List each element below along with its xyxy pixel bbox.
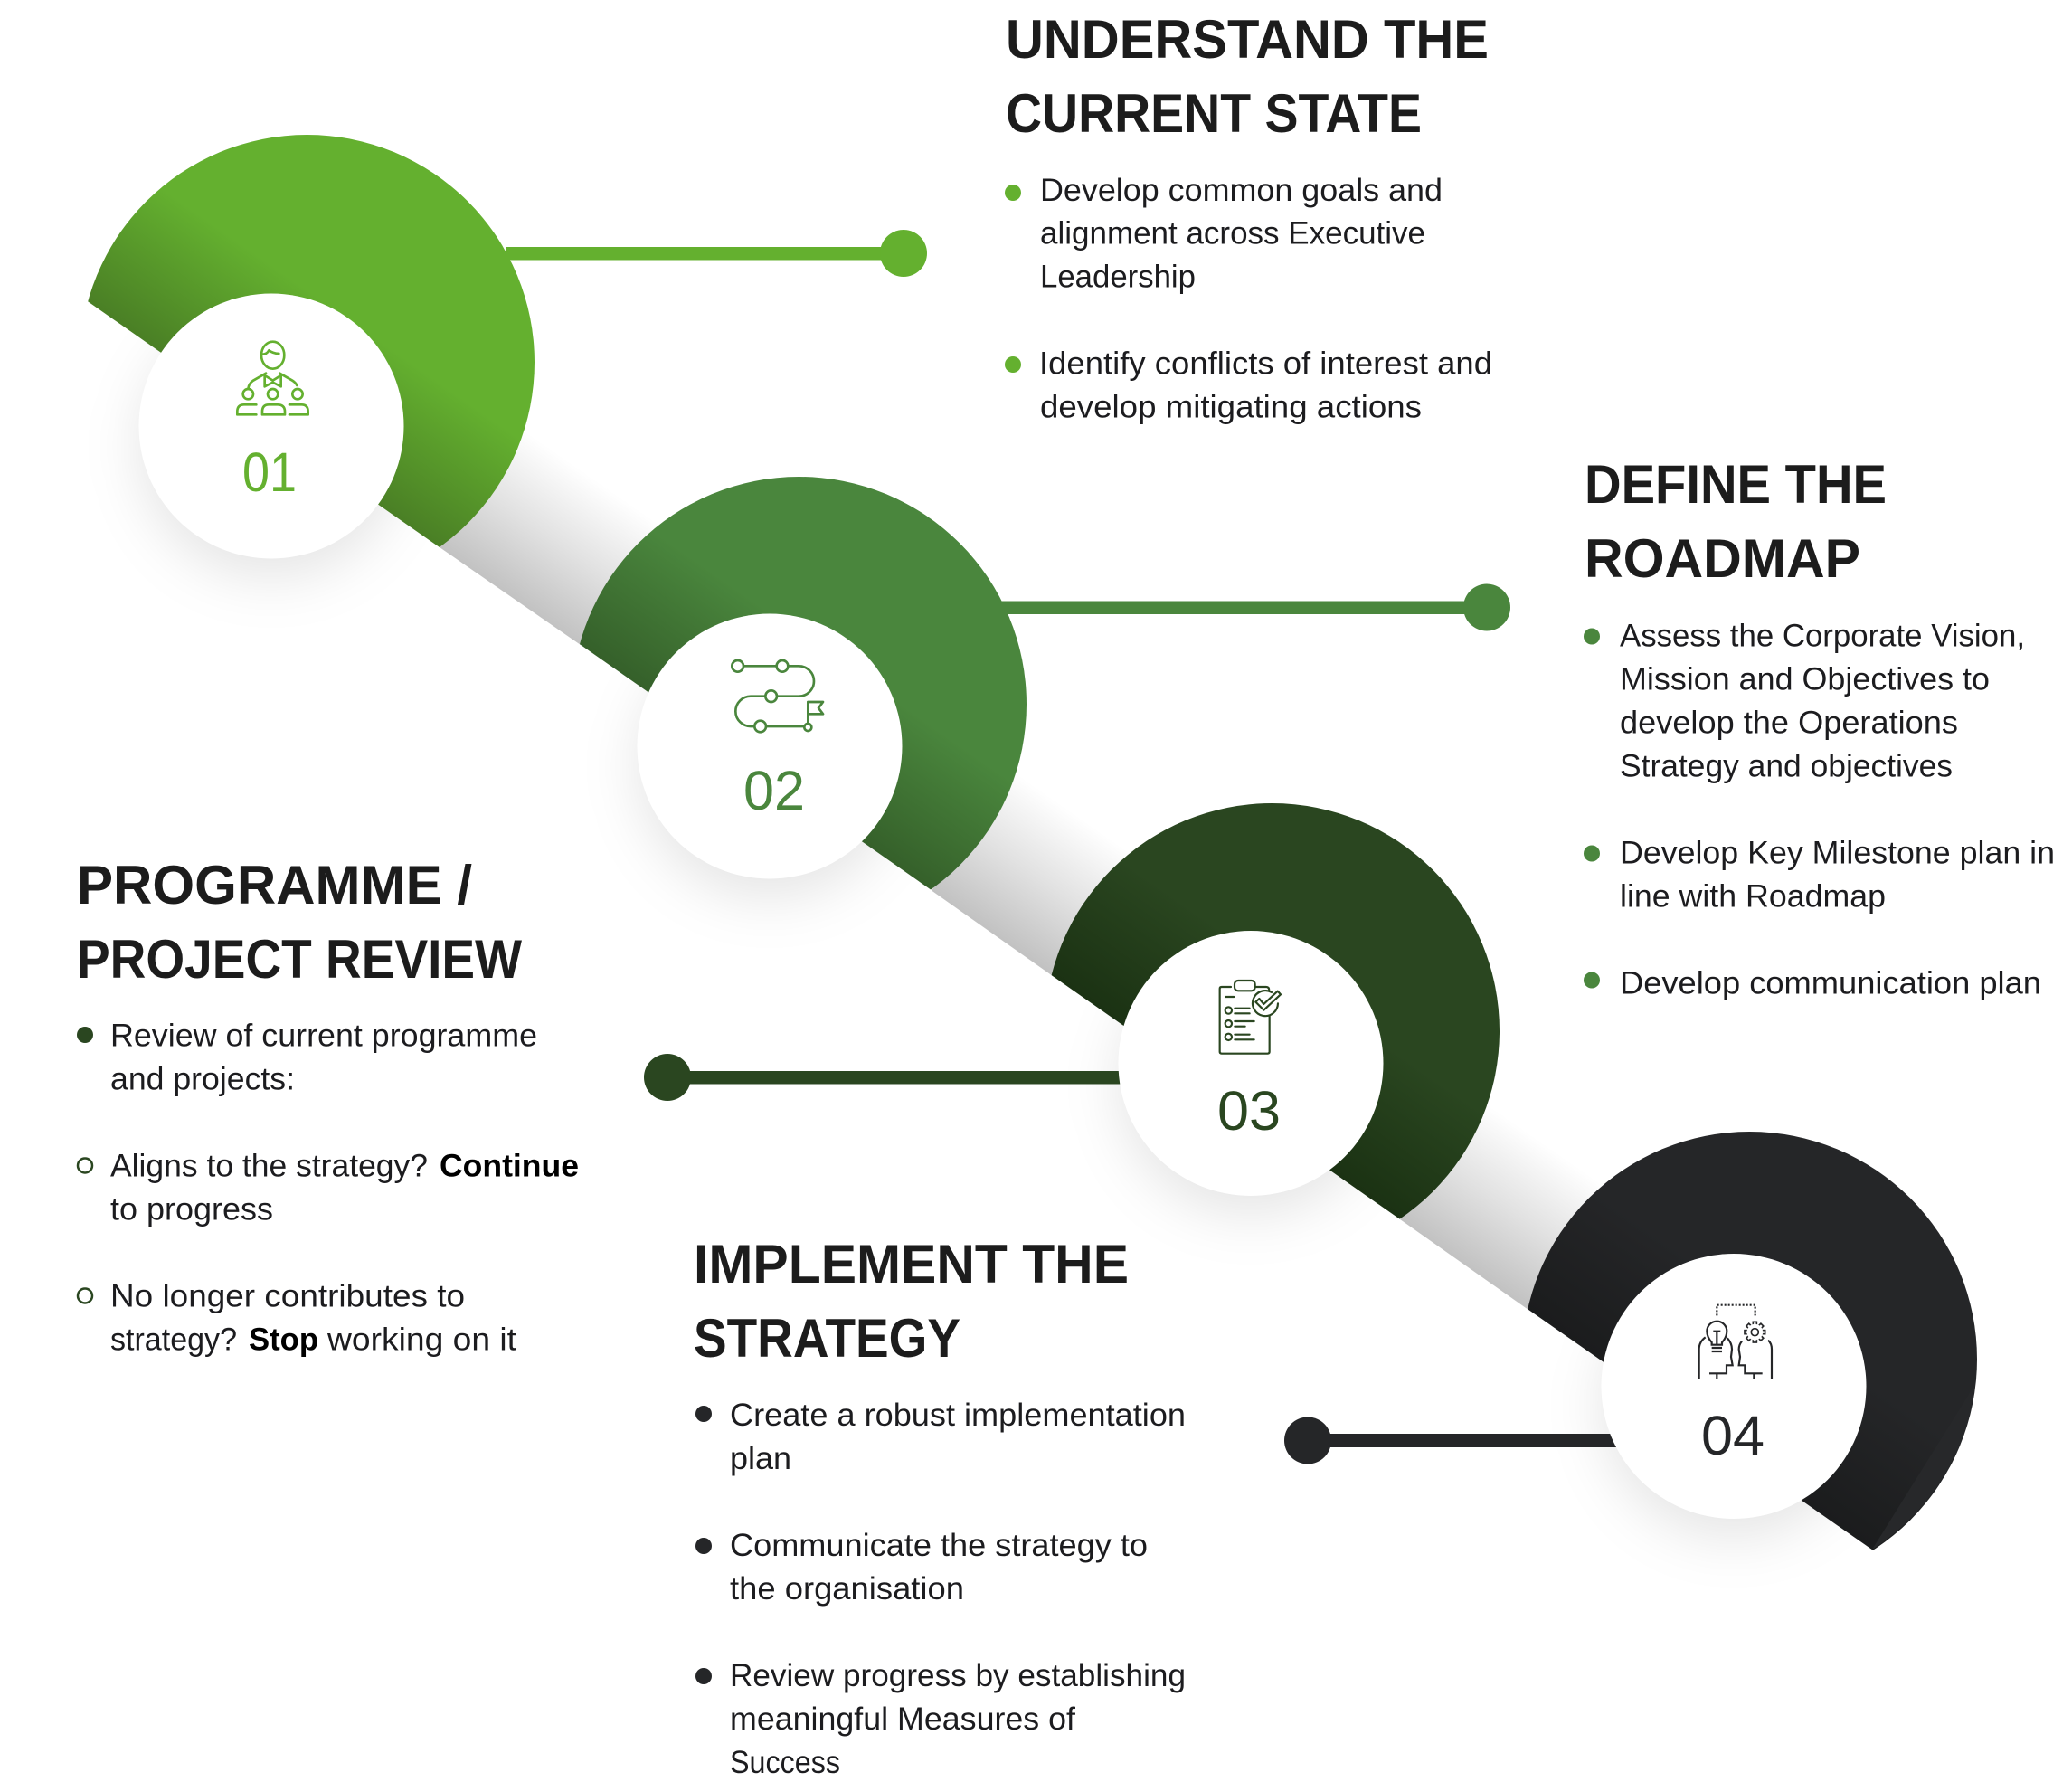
bullet: conflicts of interest: develop mitigating actions xyxy=(1040,389,1422,425)
sub-bullet: stop xyxy=(78,1279,516,1357)
heading: implement the strategy xyxy=(694,1234,1129,1369)
bullet: milestone plan: Develop Key Milestone plan in xyxy=(1620,836,2055,870)
step 04 graphic xyxy=(1284,1132,1977,1587)
number 03: 03 xyxy=(1217,1080,1281,1142)
bullet: common goals xyxy=(1005,173,1443,295)
connector line and dot 02 xyxy=(986,584,1510,631)
icon: leader with team xyxy=(237,342,308,414)
heading: define the roadmap xyxy=(1585,454,1887,589)
heading: implement the strategy: IMPLEMENT THE xyxy=(694,1234,1129,1294)
bullet: conflicts of interest xyxy=(1005,346,1492,425)
sub-bullet: stop: Stop xyxy=(249,1322,318,1357)
icon: two heads with bulb and gear xyxy=(1699,1305,1772,1379)
sub-bullet: continue: Aligns to the strategy? xyxy=(110,1149,428,1183)
white circle 01 xyxy=(139,293,403,559)
white circle 04 xyxy=(1601,1254,1867,1519)
bullet: common goals: Leadership xyxy=(1040,259,1196,295)
heading: define the roadmap: ROADMAP xyxy=(1585,528,1860,589)
diagonal shadow band 3 to 4 xyxy=(1400,1101,1611,1310)
step 03 graphic xyxy=(644,803,1500,1258)
heading: programme / project review: PROGRAMME / xyxy=(77,855,472,915)
heading: understand the current state xyxy=(1006,9,1489,144)
connector line and dot 03 xyxy=(644,1054,1144,1101)
sub-bullet: stop: working on it xyxy=(326,1322,516,1357)
panel: implement the strategy xyxy=(694,1234,1186,1780)
bullet: review progress: meaningful Measures of xyxy=(730,1701,1075,1737)
diagonal shadow band 2 to 3 xyxy=(932,773,1135,976)
heading: programme / project review: PROJECT REVIEW xyxy=(77,929,522,990)
bullet: corporate vision xyxy=(1584,619,2025,783)
bullet: review of current programme: Review of current programme xyxy=(110,1019,537,1053)
heading: define the roadmap: DEFINE THE xyxy=(1585,454,1887,515)
ring segment 01 xyxy=(88,135,535,547)
number 01: 01 xyxy=(242,441,297,503)
ring 04 lighter wedge xyxy=(1872,1384,1975,1550)
sub-bullet: stop: No longer contributes to xyxy=(110,1279,465,1313)
white circle 03 xyxy=(1118,931,1384,1196)
bullet: implementation plan: Create a robust implementation xyxy=(730,1398,1186,1433)
sub-bullet: continue: to progress xyxy=(110,1192,273,1227)
bullet: review progress: Success xyxy=(730,1745,840,1780)
soft shadow under circle 03 xyxy=(1119,951,1383,1215)
bullet: communication plan: Develop communication plan xyxy=(1620,966,2041,1000)
bullet: conflicts of interest: Identify conflicts of interest and xyxy=(1039,346,1492,382)
connector line and dot 04 xyxy=(1284,1417,1630,1464)
bullet: review progress: Review progress by establishing xyxy=(730,1658,1186,1693)
bullet: review of current programme: and projects: xyxy=(110,1062,295,1096)
panel: define the roadmap xyxy=(1584,454,2055,1000)
icon: clipboard checklist xyxy=(1220,981,1281,1054)
ring segment 03 xyxy=(1045,803,1500,1258)
ring segment 04 xyxy=(1522,1132,1977,1587)
heading: understand the current state: CURRENT STATE xyxy=(1006,83,1422,144)
sub-bullet: continue: Continue xyxy=(440,1149,579,1183)
heading: understand the current state: UNDERSTAND THE xyxy=(1006,9,1489,70)
bullet: review of current programme xyxy=(77,1019,537,1096)
bullet: milestone plan xyxy=(1584,836,2055,914)
bullet: communicate the strategy xyxy=(695,1528,1148,1607)
bullet: review progress xyxy=(695,1658,1186,1780)
panel: programme / project review xyxy=(77,855,579,1357)
sub-bullet: continue xyxy=(78,1149,579,1227)
step 02 graphic xyxy=(572,477,1510,932)
soft shadow under circle 01 xyxy=(139,314,403,578)
bullet: implementation plan xyxy=(695,1398,1186,1476)
bullet: communicate the strategy: Communicate the strategy to xyxy=(730,1528,1148,1563)
bullet: corporate vision: Assess the Corporate Vision, xyxy=(1620,619,2025,653)
heading: programme / project review xyxy=(77,855,522,990)
bullet: communicate the strategy: the organisation xyxy=(730,1571,964,1607)
bullet: implementation plan: plan xyxy=(730,1441,791,1476)
soft shadow under circle 02 xyxy=(638,634,902,898)
bullet: corporate vision: Strategy and objectives xyxy=(1620,749,1953,783)
icon: roadmap path with flag xyxy=(732,660,823,732)
number 04: 04 xyxy=(1701,1405,1765,1466)
soft shadow under circle 04 xyxy=(1602,1274,1866,1538)
heading: implement the strategy: STRATEGY xyxy=(694,1308,960,1369)
diagonal shadow band 1 to 2 xyxy=(440,429,663,645)
bullet: milestone plan: line with Roadmap xyxy=(1620,879,1886,914)
bullet: common goals: Develop common goals and xyxy=(1040,173,1443,208)
step 01 graphic xyxy=(80,135,927,590)
bullet: corporate vision: Mission and Objectives to xyxy=(1620,662,1990,697)
bullet: common goals: alignment across Executive xyxy=(1040,215,1425,251)
connector line and dot 01 xyxy=(506,230,927,277)
sub-bullet: stop: strategy? xyxy=(110,1322,237,1357)
ring segment 02 xyxy=(580,477,1027,890)
bullet: corporate vision: develop the Operations xyxy=(1620,706,1958,740)
white circle 02 xyxy=(637,613,903,879)
number 02: 02 xyxy=(743,760,805,821)
panel: understand the current state xyxy=(1005,9,1492,425)
